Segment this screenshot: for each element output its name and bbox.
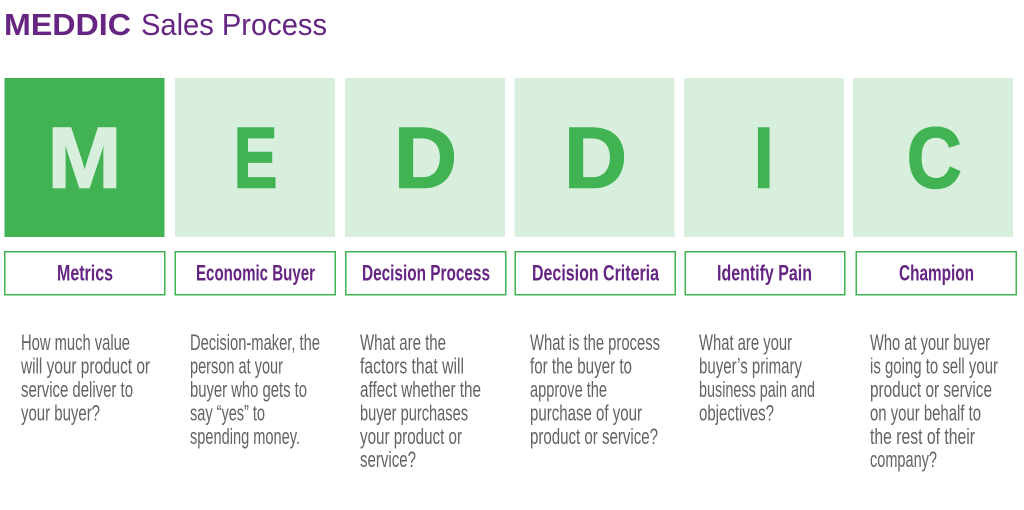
text block: Metrics description: [20, 330, 150, 426]
text block: Decision Criteria description: What is the process: [530, 330, 660, 355]
label: Identify Pain: [685, 252, 845, 295]
title: [4, 7, 327, 42]
label: Decision Criteria: Decision Criteria: [532, 260, 660, 286]
panel: I tile: I: [754, 110, 774, 206]
text block: Economic Buyer description: spending money.: [190, 424, 300, 449]
label: Decision Criteria: [515, 252, 675, 295]
text block: Economic Buyer description: [190, 330, 320, 449]
title: MEDDIC: [4, 7, 131, 42]
label: Metrics: Metrics: [57, 260, 113, 286]
title: Sales Process: [141, 7, 327, 42]
panel: second D tile: D: [564, 110, 627, 206]
text block: Decision Criteria description: [530, 330, 660, 449]
panel: M tile: M: [48, 110, 122, 206]
label: Economic Buyer: [175, 252, 335, 295]
text block: Decision Process description: [360, 330, 481, 472]
text block: Decision Process description: affect whether the: [360, 377, 481, 402]
text block: Identify Pain description: [699, 330, 815, 426]
text block: Champion description: [870, 330, 998, 472]
text block: Decision Process description: service?: [360, 447, 416, 472]
text block: Decision Criteria description: product or service?: [530, 424, 658, 449]
text block: Economic Buyer description: person at your: [190, 354, 283, 378]
panel: C tile: [853, 78, 1013, 237]
label: Decision Process: Decision Process: [362, 260, 490, 286]
text block: Metrics description: your buyer?: [21, 400, 100, 426]
text block: Decision Process description: factors that will: [360, 354, 464, 378]
text block: Champion description: company?: [870, 447, 937, 472]
text block: Identify Pain description: objectives?: [699, 400, 774, 426]
label: Metrics: [5, 252, 165, 295]
text block: Identify Pain description: buyer’s primary: [699, 354, 802, 378]
panel: D tile: D: [394, 110, 457, 206]
label: Champion: [856, 252, 1016, 295]
text block: Decision Criteria description: purchase of your: [530, 400, 642, 426]
label: Economic Buyer: Economic Buyer: [196, 260, 315, 286]
panel: E tile: E: [234, 110, 278, 206]
text block: Identify Pain description: What are your: [699, 330, 792, 355]
panel: I tile: [684, 78, 844, 237]
text block: Metrics description: will your product or: [20, 354, 150, 378]
text block: Economic Buyer description: buyer who gets to: [190, 377, 307, 402]
panel: C tile: C: [907, 110, 962, 206]
text block: Decision Process description: What are the: [360, 330, 446, 355]
text block: Decision Process description: your product or: [360, 424, 462, 449]
text block: Identify Pain description: business pain and: [699, 377, 815, 402]
text block: Decision Criteria description: for the buyer to: [530, 354, 632, 378]
panel: M tile: [4, 78, 164, 237]
panel: second D tile: [514, 78, 674, 237]
label: Champion: Champion: [899, 260, 974, 286]
label: Decision Process: [346, 252, 506, 295]
label: Identify Pain: Identify Pain: [717, 260, 812, 286]
text block: Decision Process description: buyer purchases: [360, 400, 468, 426]
panel: D tile: [345, 78, 505, 237]
text block: Decision Criteria description: approve the: [530, 377, 607, 402]
text block: Metrics description: service deliver to: [21, 377, 133, 402]
panel: E tile: [175, 78, 335, 237]
text block: Metrics description: How much value: [21, 330, 130, 355]
text block: Economic Buyer description: Decision-maker, the: [190, 330, 320, 355]
text block: Champion description: the rest of their: [870, 424, 975, 449]
text block: Economic Buyer description: say “yes” to: [190, 400, 265, 426]
